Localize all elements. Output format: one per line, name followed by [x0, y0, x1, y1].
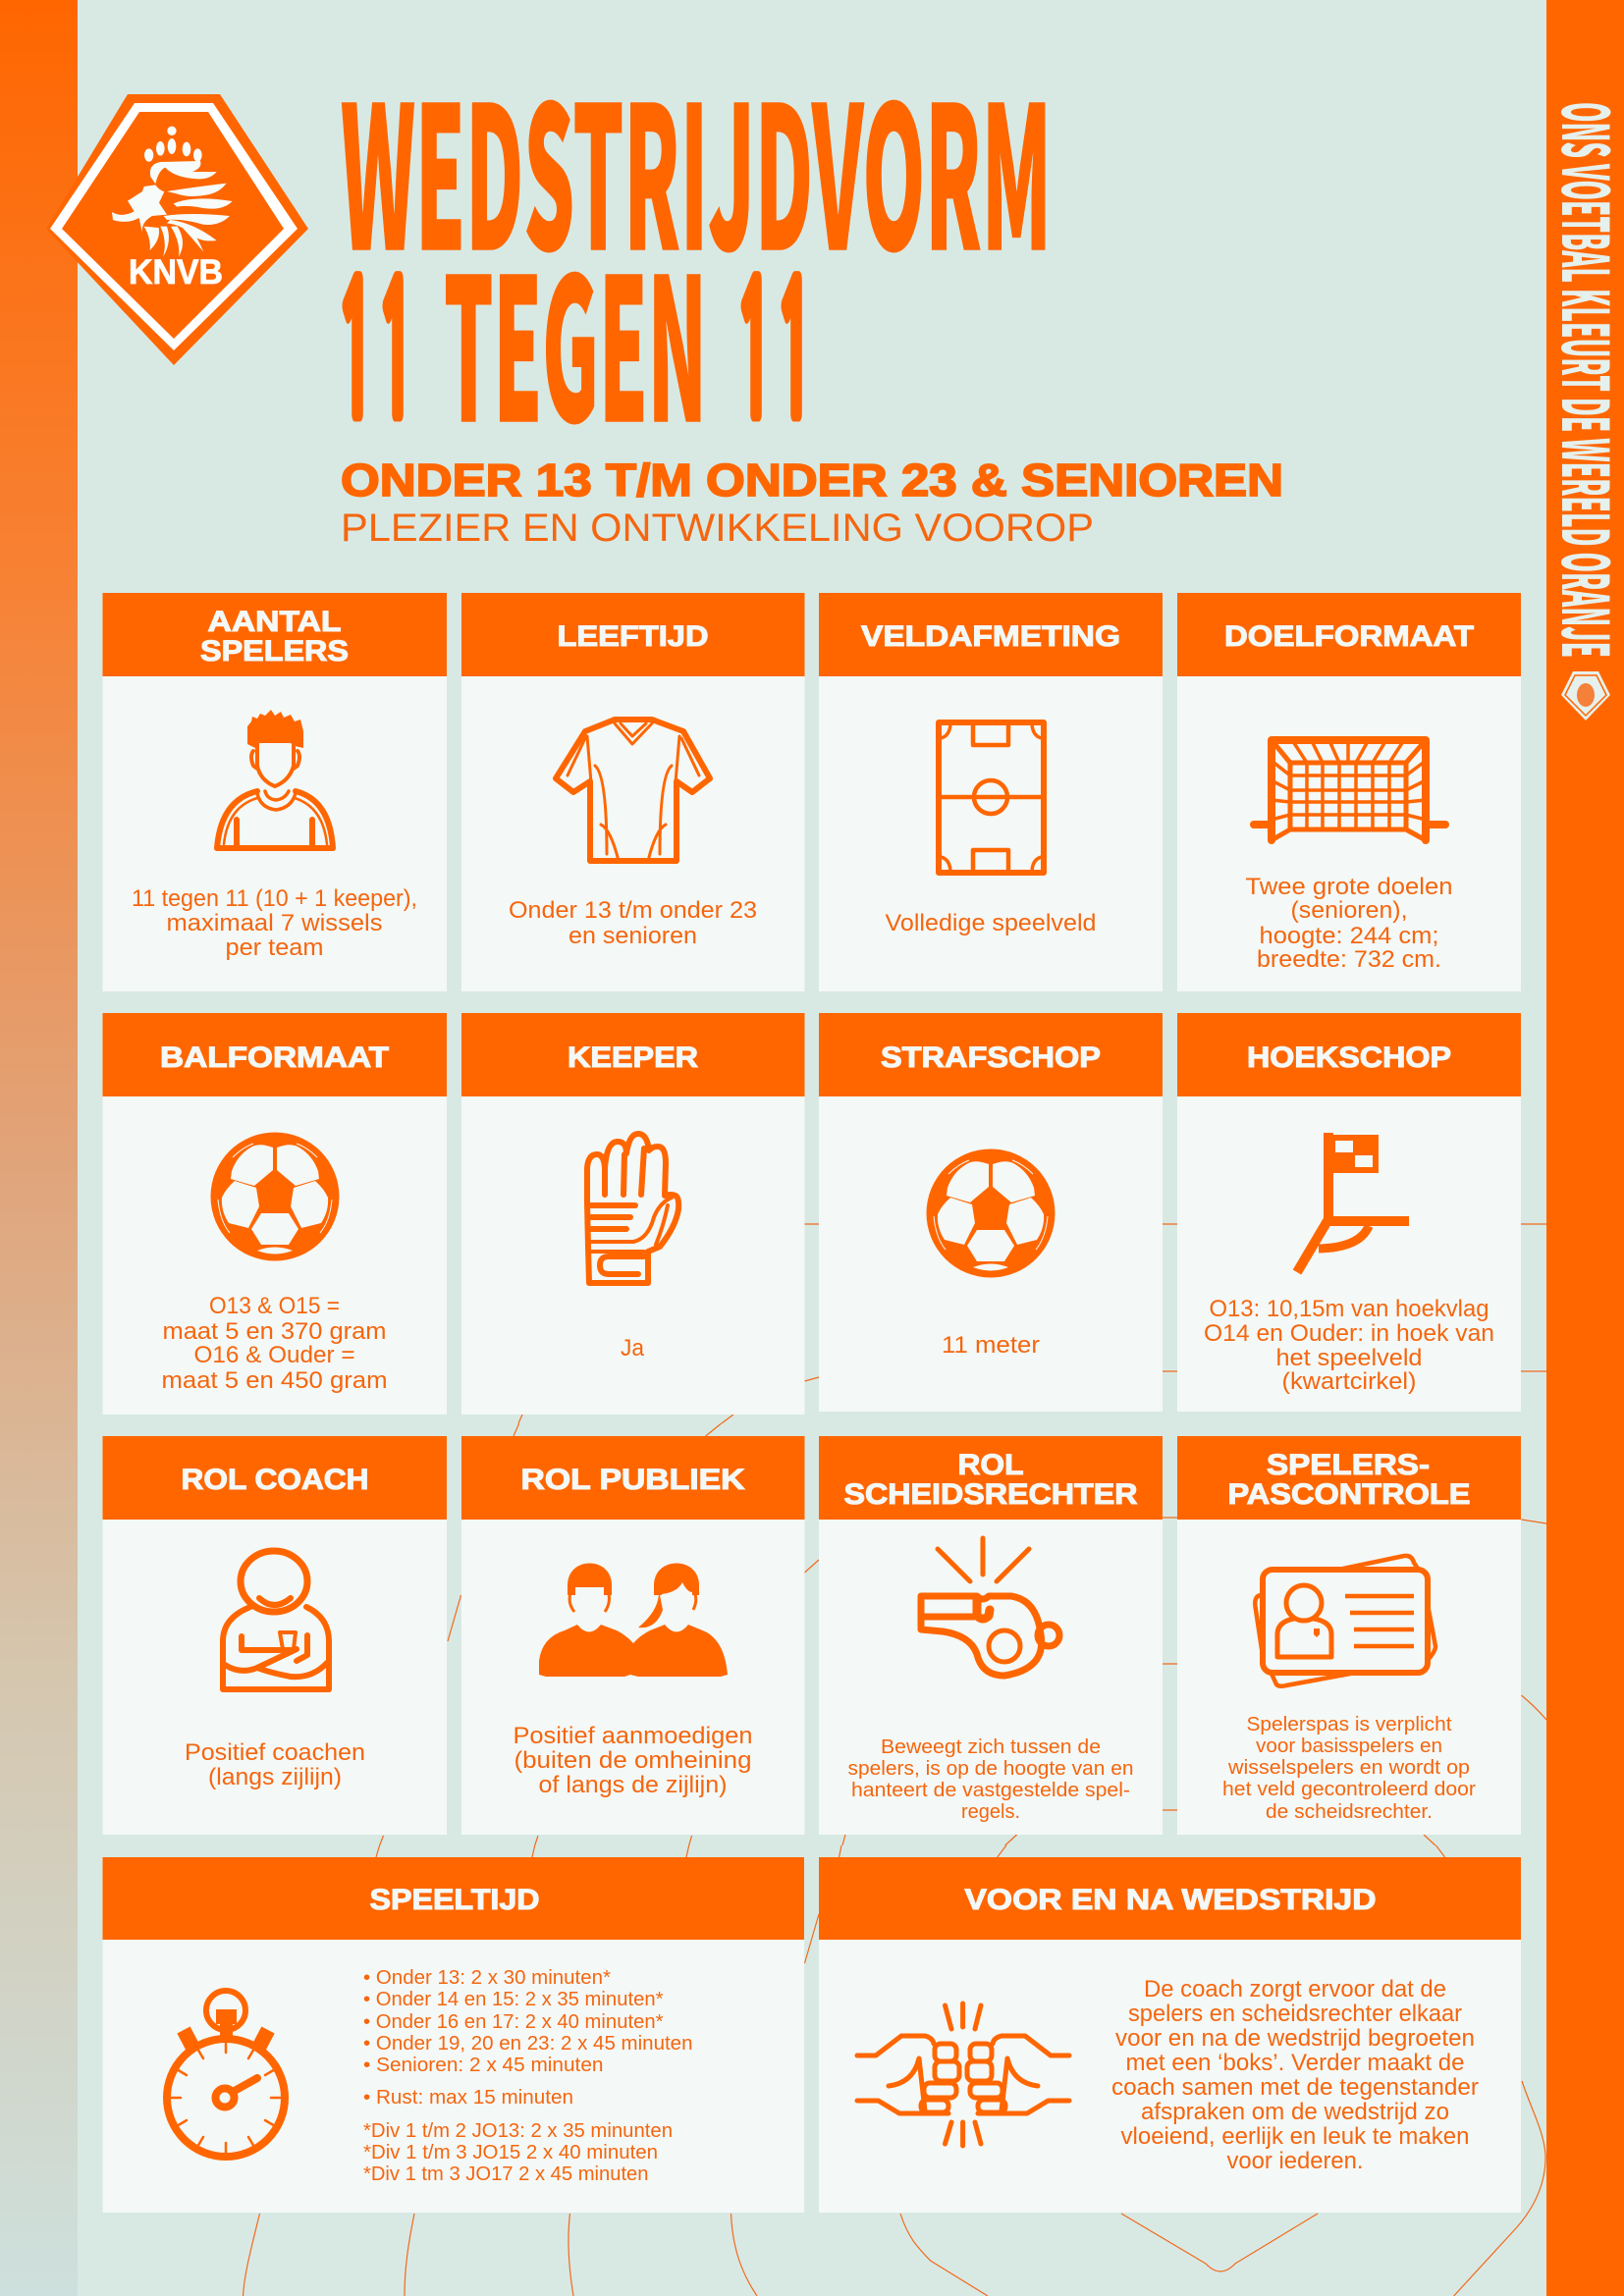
- description: (kwartcirkel): [1282, 1368, 1416, 1395]
- description: Spelerspas is verplicht: [1247, 1713, 1452, 1735]
- subtitle: [341, 454, 1283, 550]
- panel: rol publiek: [461, 1436, 805, 1835]
- description: O13 & O15 =: [209, 1293, 340, 1319]
- heading: ROL: [958, 1449, 1023, 1481]
- icon: football pitch: [939, 722, 1044, 873]
- description: regels.: [961, 1800, 1020, 1823]
- list: playing times: • Onder 19, 20 en 23: 2 x 45 minuten: [363, 2032, 693, 2055]
- logo wordmark: KNVB: [129, 253, 223, 292]
- icon: two spectators: [539, 1563, 728, 1677]
- description: vloeiend, eerlijk en leuk te maken: [1121, 2123, 1469, 2150]
- icon: goal: [1254, 740, 1445, 840]
- list: playing times: *Div 1 tm 3 JO17 2 x 45 minuten: [363, 2163, 648, 2185]
- heading: SPEELTIJD: [369, 1884, 540, 1916]
- panel: aantal spelers: [102, 593, 447, 991]
- heading: AANTAL: [208, 606, 342, 638]
- panel: leeftijd: [461, 593, 805, 991]
- description: O13: 10,15m van hoekvlag: [1210, 1296, 1489, 1322]
- description: maximaal 7 wissels: [167, 910, 383, 936]
- description: O16 & Ouder =: [194, 1342, 355, 1368]
- heading: PASCONTROLE: [1227, 1478, 1471, 1511]
- heading: DOELFORMAAT: [1224, 620, 1474, 653]
- heading: KEEPER: [568, 1041, 698, 1074]
- panel: keeper: [461, 1013, 805, 1415]
- icon: coach with folded arms: [223, 1551, 329, 1689]
- description: [509, 897, 757, 949]
- description: het speelveld: [1276, 1345, 1422, 1371]
- description: maat 5 en 450 gram: [161, 1367, 387, 1394]
- description: voor en na de wedstrijd begroeten: [1115, 2025, 1475, 2052]
- panel: strafschop: [819, 1013, 1163, 1412]
- heading: ROL PUBLIEK: [520, 1464, 745, 1496]
- heading: [1227, 1449, 1471, 1511]
- heading: [844, 1449, 1138, 1511]
- list: playing times: • Onder 13: 2 x 30 minuten*: [363, 1966, 611, 1989]
- description: O14 en Ouder: in hoek van: [1204, 1320, 1494, 1347]
- icon: football: [210, 1133, 340, 1260]
- icon: player pass: [1255, 1556, 1435, 1686]
- icon: stopwatch: [167, 1991, 285, 2157]
- icon: player: [217, 710, 333, 848]
- description: [185, 1739, 365, 1790]
- heading: HOEKSCHOP: [1247, 1041, 1451, 1074]
- icon: whistle: [921, 1538, 1059, 1676]
- description: en senioren: [568, 923, 697, 949]
- list: playing times: *Div 1 t/m 2 JO13: 2 x 35 minunten: [363, 2119, 673, 2142]
- panel: veldafmeting: [819, 593, 1163, 991]
- panel: doelformaat: [1177, 593, 1521, 991]
- panel: spelerspascontrole: [1177, 1436, 1521, 1835]
- list: playing times: • Rust: max 15 minuten: [363, 2086, 573, 2109]
- panel: hoekschop: [1177, 1013, 1521, 1412]
- description: [1111, 1976, 1479, 2174]
- heading: VELDAFMETING: [861, 620, 1120, 653]
- description: [1204, 1296, 1494, 1395]
- list: playing times: • Onder 14 en 15: 2 x 35 minuten*: [363, 1988, 664, 2010]
- description: [848, 1735, 1133, 1823]
- description: per team: [226, 934, 324, 961]
- panel: speeltijd: [102, 1857, 804, 2213]
- title: 11: [336, 262, 416, 443]
- description: coach samen met de tegenstander: [1111, 2074, 1479, 2101]
- small KNVB logo: [1561, 671, 1610, 721]
- panel: voor en na wedstrijd: [819, 1857, 1521, 2213]
- description: Volledige speelveld: [886, 910, 1096, 936]
- description: Onder 13 t/m onder 23: [509, 897, 757, 924]
- description: De coach zorgt ervoor dat de: [1144, 1976, 1446, 2002]
- description: afspraken om de wedstrijd zo: [1141, 2099, 1449, 2125]
- description: hoogte: 244 cm;: [1259, 923, 1439, 949]
- description: voor iederen.: [1227, 2148, 1363, 2174]
- description: hanteert de vastgestelde spel-: [851, 1779, 1130, 1801]
- description: [1245, 874, 1453, 973]
- description: spelers en scheidsrechter elkaar: [1128, 2001, 1462, 2027]
- heading: SPELERS-: [1267, 1449, 1430, 1481]
- panel: rol coach: [102, 1436, 447, 1835]
- icon: goalkeeper glove: [587, 1134, 678, 1283]
- description: wisselspelers en wordt op: [1227, 1756, 1470, 1779]
- description: 11 meter: [942, 1332, 1040, 1359]
- icon: shirt: [556, 720, 710, 861]
- lion emblem: [112, 127, 233, 257]
- description: Positief aanmoedigen: [513, 1723, 752, 1749]
- description: of langs de zijlijn): [538, 1772, 727, 1798]
- subtitle: ONDER 13 T/M ONDER 23 & SENIOREN: [341, 454, 1283, 506]
- heading: STRAFSCHOP: [881, 1041, 1101, 1074]
- description: de scheidsrechter.: [1266, 1800, 1433, 1823]
- title: [336, 22, 1052, 478]
- list: playing times: • Onder 16 en 17: 2 x 40 minuten*: [363, 2010, 664, 2033]
- description: Ja: [621, 1335, 645, 1362]
- title: TEGEN: [444, 193, 707, 478]
- description: Beweegt zich tussen de: [881, 1735, 1101, 1758]
- description: Twee grote doelen: [1245, 874, 1453, 900]
- heading: LEEFTIJD: [558, 620, 709, 653]
- description: (senioren),: [1290, 897, 1408, 924]
- heading: VOOR EN NA WEDSTRIJD: [964, 1884, 1377, 1916]
- subtitle: PLEZIER EN ONTWIKKELING VOOROP: [341, 507, 1094, 550]
- KNVB logo: [46, 94, 308, 365]
- icon: football: [927, 1148, 1055, 1278]
- description: (langs zijlijn): [208, 1764, 342, 1790]
- heading: BALFORMAAT: [160, 1041, 389, 1074]
- title: 11: [734, 262, 815, 443]
- description: voor basisspelers en: [1256, 1735, 1442, 1757]
- description: spelers, is op de hoogte van en: [848, 1757, 1133, 1780]
- description: Positief coachen: [185, 1739, 365, 1766]
- icon: fist bump: [857, 2003, 1069, 2146]
- icon: corner flag: [1297, 1133, 1409, 1272]
- heading: ROL COACH: [181, 1464, 369, 1496]
- heading: SCHEIDSRECHTER: [844, 1478, 1138, 1511]
- list: playing times: • Senioren: 2 x 45 minuten: [363, 2054, 603, 2076]
- description: [513, 1723, 752, 1798]
- description: 11 tegen 11 (10 + 1 keeper),: [132, 885, 417, 912]
- heading: SPELERS: [200, 635, 349, 667]
- right orange strip with slogan: [1543, 0, 1624, 2296]
- left gradient strip: [0, 0, 78, 2296]
- description: (buiten de omheining: [514, 1747, 752, 1774]
- description: [1222, 1713, 1476, 1823]
- description: het veld gecontroleerd door: [1222, 1778, 1476, 1800]
- heading: [200, 606, 349, 667]
- description: [132, 885, 417, 961]
- description: maat 5 en 370 gram: [163, 1318, 387, 1345]
- list: playing times: [363, 1966, 693, 2185]
- panel: balformaat: [102, 1013, 447, 1415]
- description: [161, 1293, 387, 1394]
- description: breedte: 732 cm.: [1257, 946, 1441, 973]
- description: met een ‘boks’. Verder maakt de: [1125, 2050, 1465, 2076]
- list: playing times: *Div 1 t/m 3 JO15 2 x 40 minuten: [363, 2141, 658, 2163]
- panel: rol scheidsrechter: [819, 1436, 1163, 1835]
